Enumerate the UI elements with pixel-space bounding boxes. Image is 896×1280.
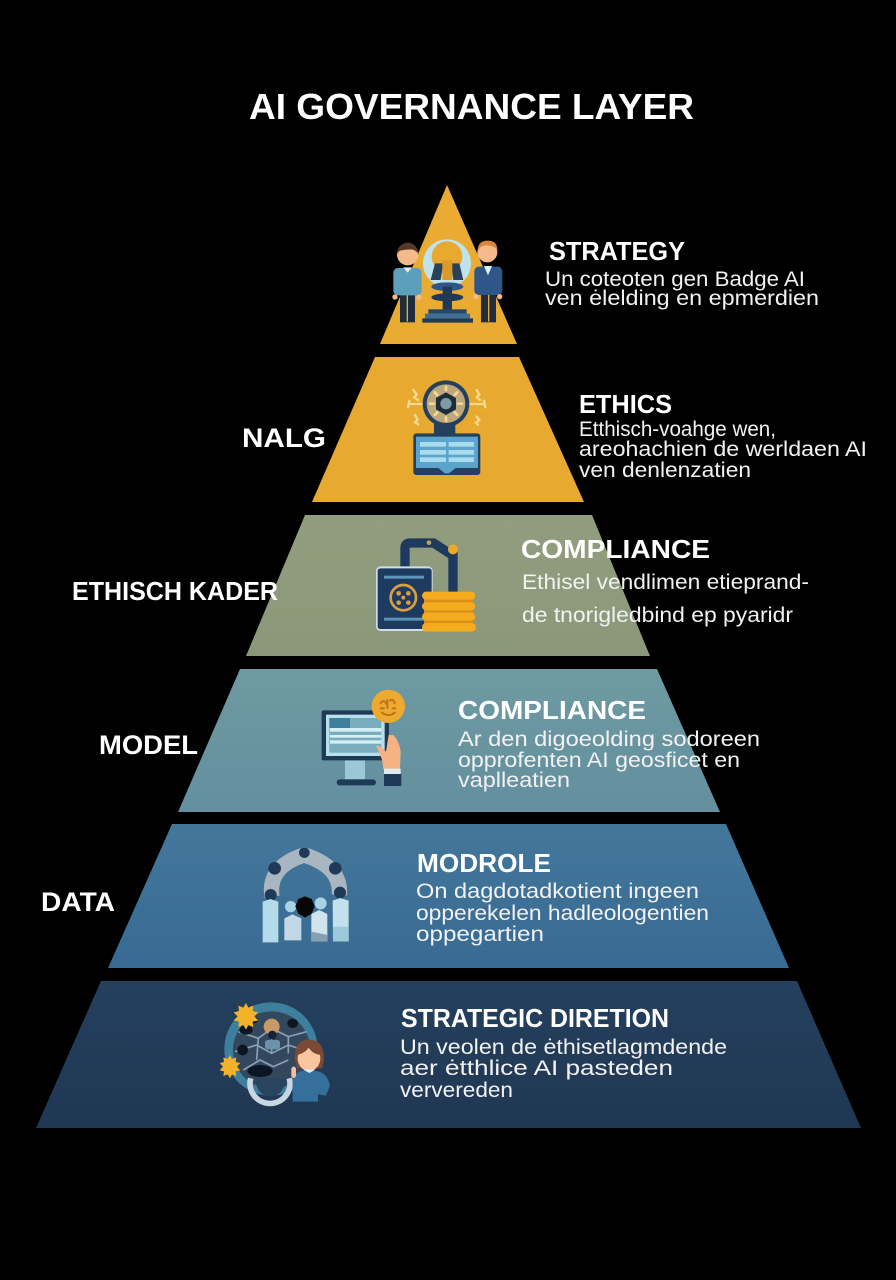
pyramid band: ethics: [312, 357, 584, 502]
panel: model tier: [99, 669, 760, 812]
body text: data: oppegartien: [416, 923, 544, 946]
side label: NALG: NALG: [242, 423, 326, 453]
icon: two leaders with light bulb: [392, 239, 502, 323]
icon: padlock with coins: [376, 540, 476, 632]
body text: strategy: ven ėlelding en epmerdien: [545, 287, 819, 310]
body text: data: [416, 880, 709, 946]
panel: data tier: [41, 824, 789, 968]
body text: strategic direction: Un veolen de ėthisetlagmdende: [400, 1036, 727, 1059]
body text: model: [458, 728, 760, 792]
body text: data: On dagdotadkotient ingeen: [416, 880, 699, 903]
body text: strategic direction: aer ėtthlice AI pasteden: [400, 1057, 673, 1080]
side label: ethisch kader: ETHISCH KADER: [72, 578, 278, 606]
body text: strategic direction: [400, 1036, 727, 1102]
body text: model: opprofenten AI geosficet en: [458, 749, 740, 772]
body text: strategic direction: ververeden: [400, 1079, 513, 1102]
body text: strategy: Un coteoten gen Badge AI: [545, 268, 805, 291]
body text: model: Ar den digoeolding sodoreen: [458, 728, 760, 751]
pyramid band: apex: [380, 185, 517, 344]
panel: ethics tier: [242, 357, 867, 502]
side label: model: MODEL: [99, 730, 198, 760]
side label: data: DATA: [41, 887, 115, 917]
body text: compliance: Ethisel vendlimen etieprand-: [522, 571, 809, 594]
body text: ethics: ven denlenzatien: [579, 459, 751, 482]
pyramid band: model: [178, 669, 720, 812]
body text: model: vaplleatien: [458, 769, 570, 792]
heading: strategy: STRATEGY: [549, 236, 685, 266]
heading: compliance: COMPLIANCE: [521, 534, 710, 564]
panel: ethical framework tier: [72, 515, 809, 656]
heading: strategic direction: STRATEGIC DIRETION: [401, 1003, 669, 1033]
title: AI GOVERNANCE LAYER: [249, 86, 694, 127]
pyramid band: data: [108, 824, 789, 968]
body text: ethics: areohachien de werldaen AI: [579, 438, 867, 461]
body text: compliance: [522, 571, 809, 627]
pyramid band: base: [36, 981, 861, 1128]
heading: compliance: COMPLIANCE: [458, 695, 646, 725]
heading: ethics: ETHICS: [579, 389, 672, 419]
icon: gear over monitor: [408, 380, 485, 475]
panel: strategy tier: [380, 185, 819, 344]
icon: monitor with hand and coin: [322, 690, 405, 786]
body text: ethics: Etthisch-voahge wen,: [579, 418, 776, 441]
body text: data: opperekelen hadleologentien: [416, 902, 709, 925]
body text: strategy: [545, 268, 819, 310]
panel: strategic direction tier: [36, 981, 861, 1128]
icon: network globe with person and suns: [220, 1002, 330, 1103]
body text: ethics: [579, 418, 867, 482]
heading: modrole: MODROLE: [417, 848, 551, 878]
icon: people under network arch: [263, 847, 349, 942]
pyramid band: compliance: [246, 515, 650, 656]
body text: compliance: de tnorigledbind ep pyaridr: [522, 604, 793, 627]
